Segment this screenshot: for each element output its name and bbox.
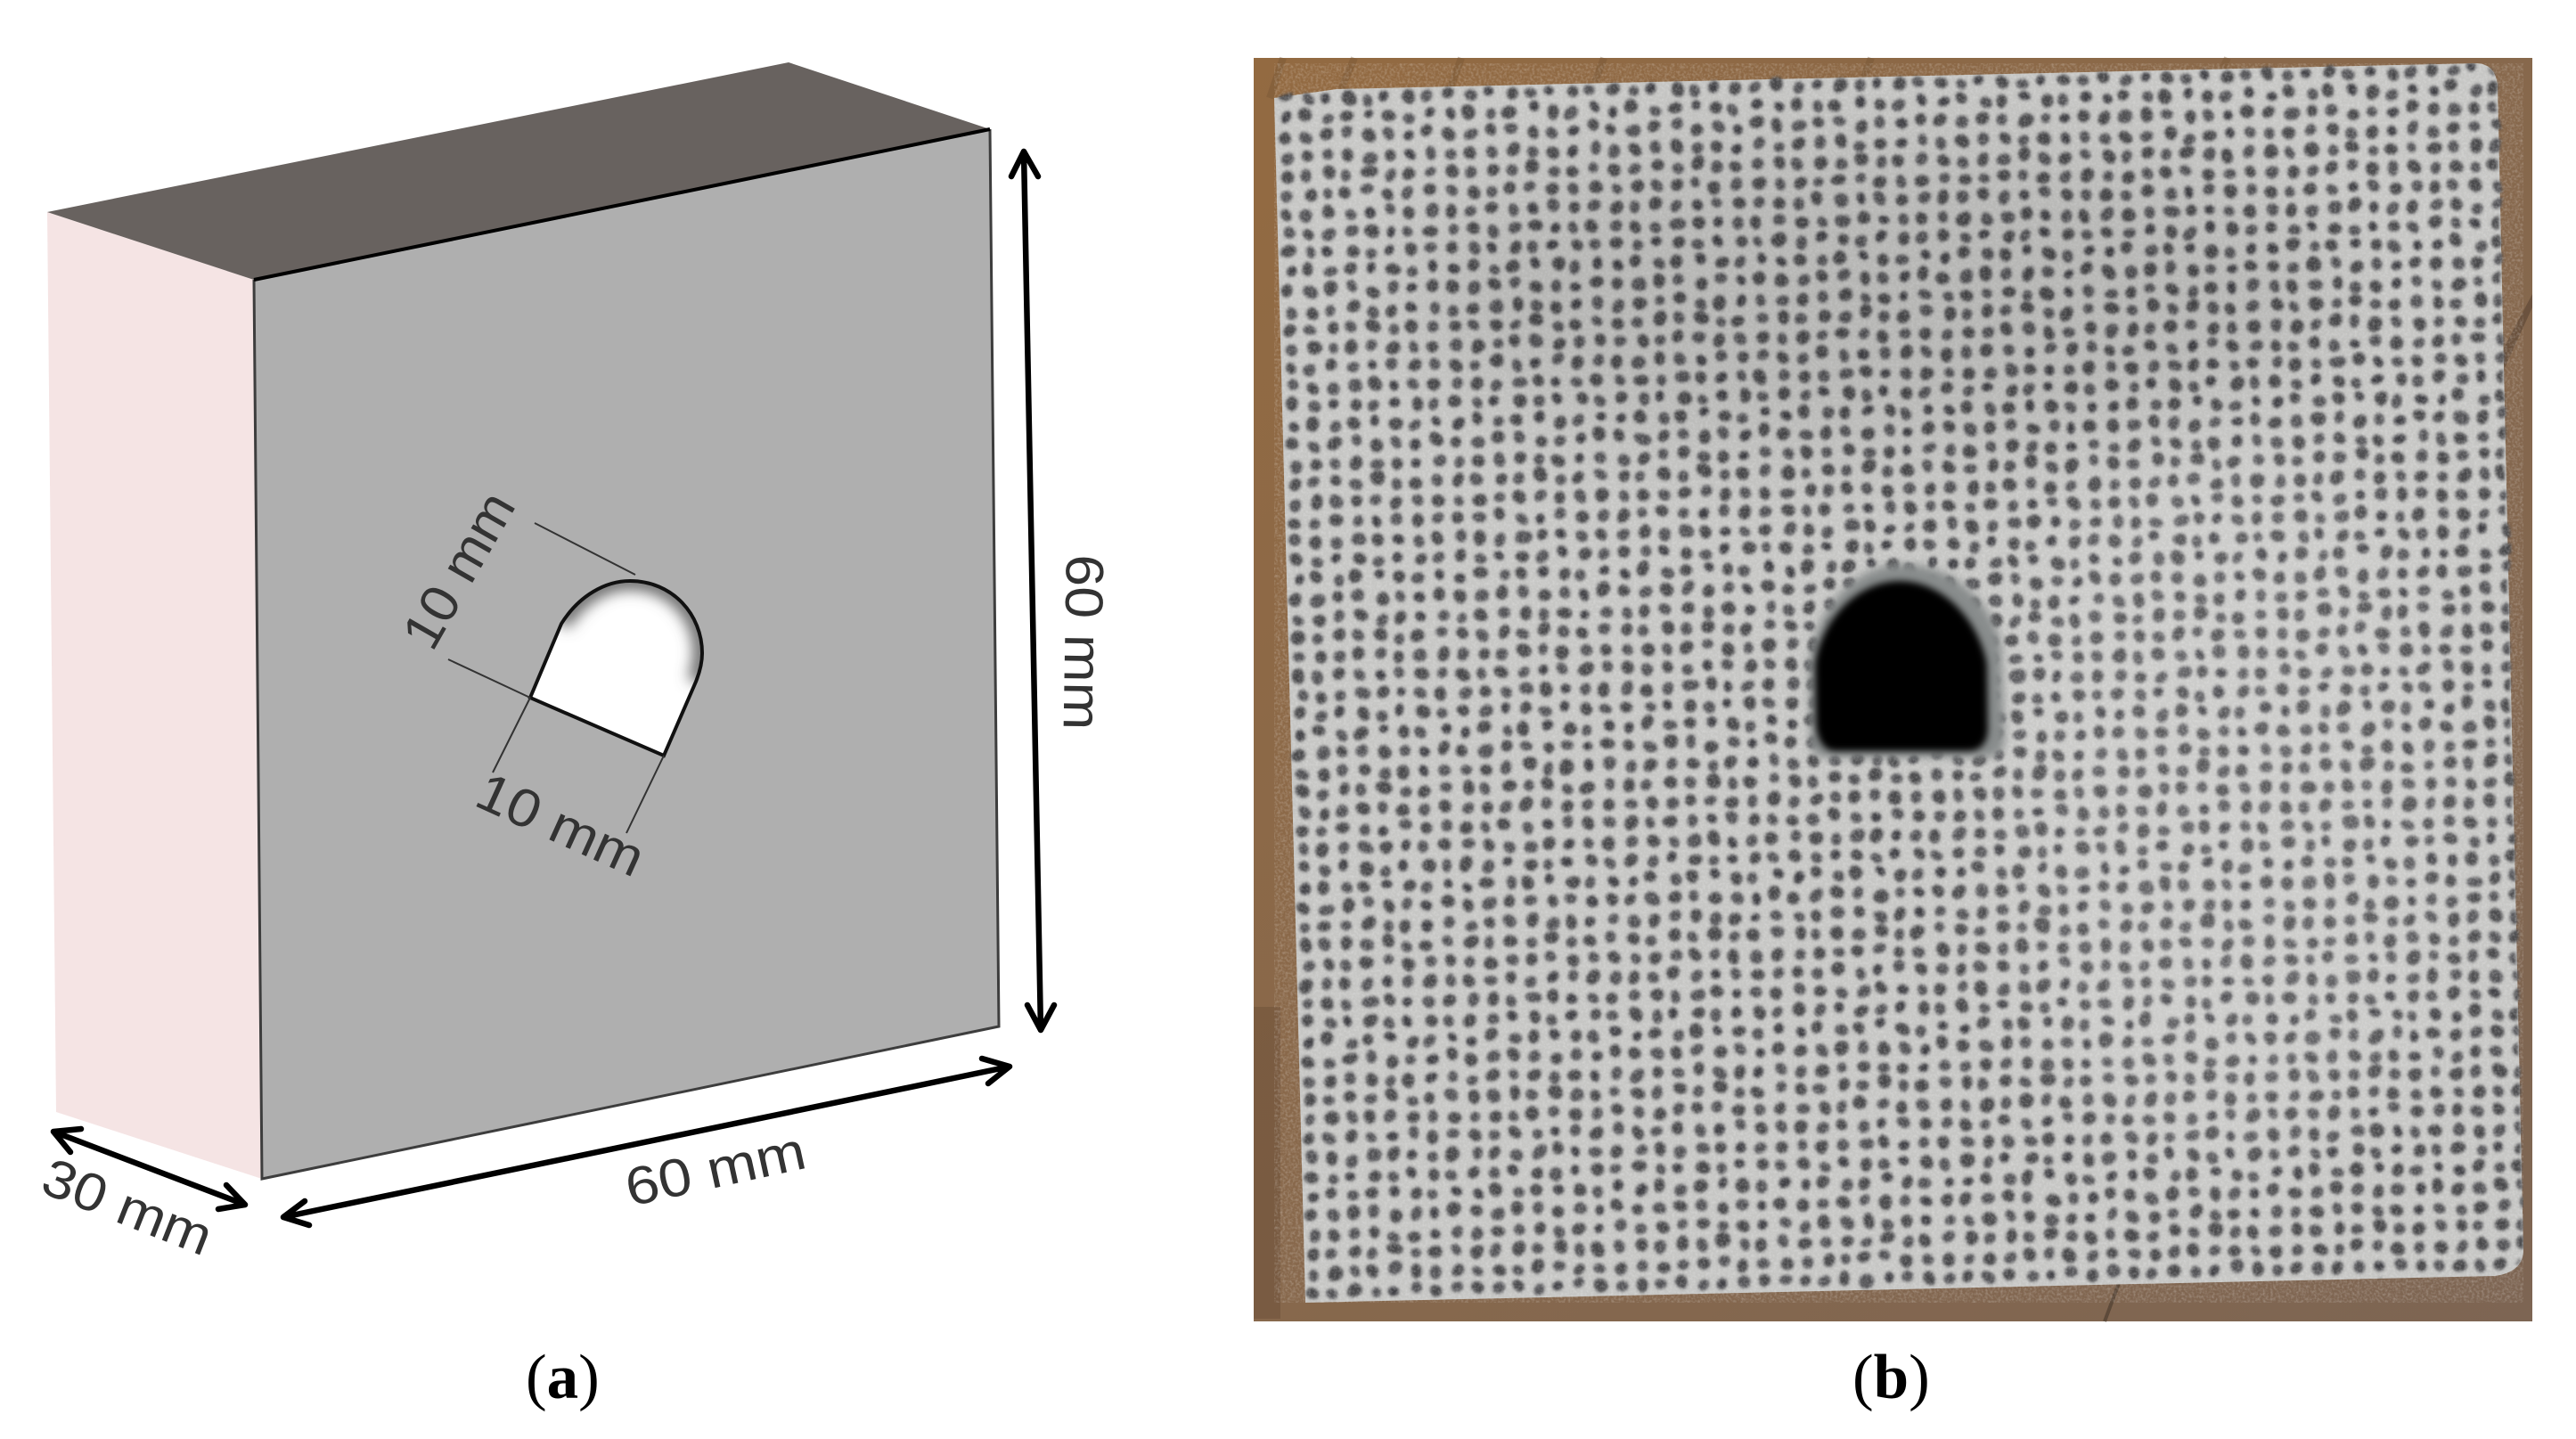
hole dimension extension lines (448, 523, 664, 833)
label: 30 mm depth: 30 mm (34, 1147, 221, 1267)
panel b: photograph of dotted specimen (1254, 58, 2532, 1321)
caption (a): (a) (526, 1343, 600, 1412)
arrow: 60 mm width (283, 1059, 1010, 1225)
block left side face (47, 212, 262, 1179)
D-shaped hole in specimen (1809, 564, 2005, 757)
wood background (1254, 58, 2532, 1321)
arrow: 60 mm height (1011, 151, 1054, 1030)
caption (b): (b) (1852, 1343, 1930, 1412)
label: hole width 10 mm: 10 mm (468, 761, 654, 888)
dotted specimen surface (1274, 63, 2523, 1303)
panel a: 3D block schematic (34, 62, 1115, 1267)
block top face (47, 62, 990, 280)
block front face with hole (254, 129, 999, 1179)
label: 60 mm width: 60 mm (619, 1121, 811, 1218)
label: hole height 10 mm: 10 mm (390, 481, 527, 658)
label: 60 mm height: 60 mm (1052, 554, 1115, 731)
arrow: 30 mm depth (53, 1129, 245, 1209)
